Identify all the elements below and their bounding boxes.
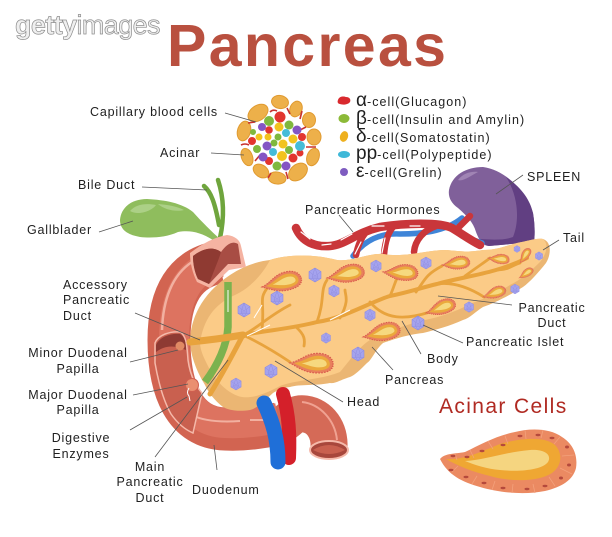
legend item alpha: α-cell(Glucagon): [356, 90, 468, 111]
labels: Bile Duct: [78, 178, 135, 192]
common bile duct: [205, 282, 228, 382]
duodenum: [162, 262, 348, 459]
labels: Minor Duodenal: [28, 346, 128, 360]
title: Pancreas: [167, 13, 446, 79]
pancreas body: [190, 239, 550, 411]
minor papilla: [176, 342, 184, 350]
labels: Body: [427, 352, 459, 366]
labels: Pancreatic: [116, 475, 184, 489]
labels: Major Duodenal: [28, 388, 128, 402]
labels: Acinar: [160, 146, 200, 160]
blue vessel: [264, 403, 278, 462]
labels: Enzymes: [52, 447, 110, 461]
labels: Pancreatic Islet: [466, 335, 564, 349]
spleen: [449, 167, 535, 246]
label lines: [99, 113, 559, 470]
labels: Papilla: [56, 403, 100, 417]
pancreatic islets: [231, 246, 543, 390]
red vessel: [283, 394, 289, 458]
labels: Pancreatic Hormones: [305, 203, 440, 217]
blue vein: [353, 218, 482, 256]
legend item beta: β-cell(Insulin and Amylin): [356, 108, 525, 129]
labels: Head: [347, 395, 380, 409]
watermark: gettyimages: [15, 10, 160, 40]
legend item pp: pp-cell(Polypeptide): [356, 143, 493, 164]
mesenteric vessels: [264, 394, 289, 462]
hormone arrows: [301, 226, 420, 254]
acini: [260, 246, 535, 374]
acinar cell diagram: [440, 429, 576, 493]
labels: Accessory: [63, 278, 128, 292]
labels: [27, 105, 586, 505]
red artery: [296, 216, 480, 255]
labels: Duct: [136, 491, 164, 505]
C-shaped duodenum tube: [169, 262, 278, 429]
legend item epsilon: ε-cell(Grelin): [356, 161, 443, 182]
labels: Pancreas: [385, 373, 444, 387]
duodenum top opening: [190, 235, 246, 288]
labels: Main: [135, 460, 165, 474]
labels: Pancreatic: [518, 301, 586, 315]
gallbladder and bile duct: [120, 180, 223, 240]
labels: Pancreatic: [63, 293, 130, 307]
labels: Duodenum: [192, 483, 260, 497]
labels: SPLEEN: [527, 170, 581, 184]
labels: Duct: [538, 316, 566, 330]
labels: Papilla: [56, 362, 100, 376]
lower loop of duodenum: [275, 402, 348, 459]
labels: Gallblader: [27, 223, 92, 237]
blood vessels: [296, 216, 482, 256]
acinar cells heading: Acinar Cells: [439, 395, 567, 418]
legend item delta: δ-cell(Somatostatin): [356, 126, 491, 147]
major papilla: [186, 378, 198, 392]
legend: [338, 90, 525, 182]
pancreatic ducts: [190, 258, 527, 394]
opened duodenum window: [155, 332, 202, 433]
islet cell cluster: [235, 94, 322, 185]
labels: Duct: [63, 309, 92, 323]
labels: Tail: [563, 231, 585, 245]
labels: Digestive: [52, 431, 110, 445]
labels: Capillary blood cells: [90, 105, 218, 119]
